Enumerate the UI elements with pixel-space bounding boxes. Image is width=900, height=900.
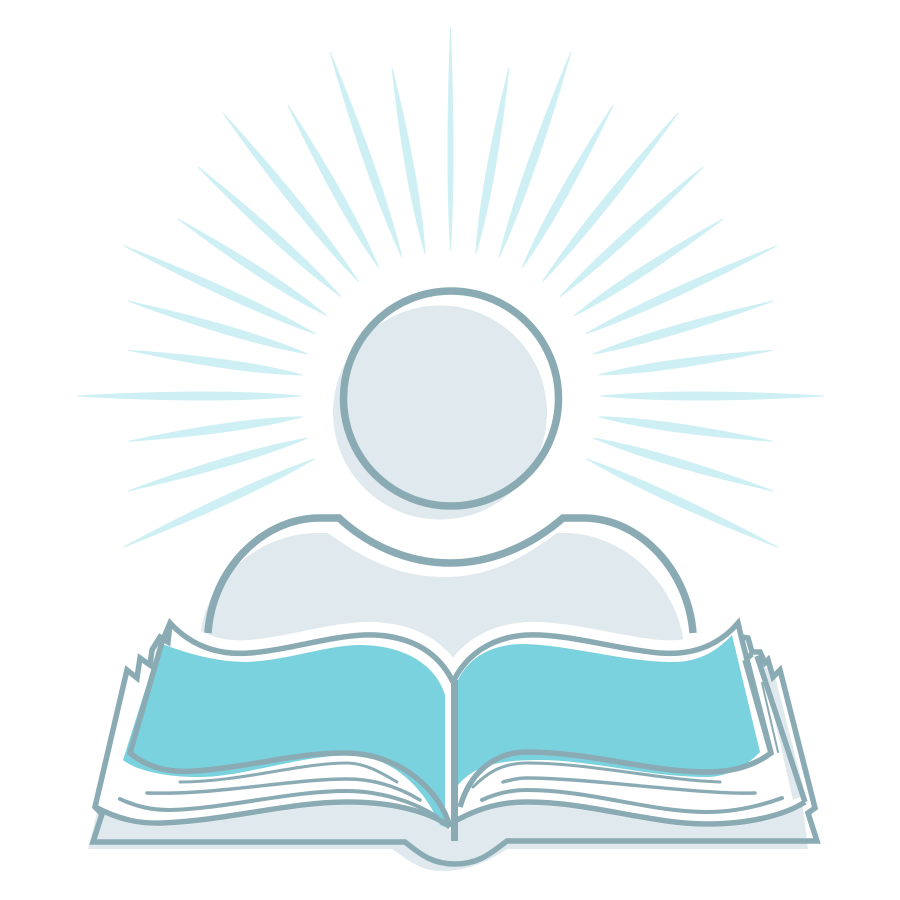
cover and stepped page stack outline <box>93 623 817 864</box>
book cover shadow fill <box>88 800 808 871</box>
person body <box>200 518 693 665</box>
right page outline <box>453 623 771 807</box>
open book <box>88 623 817 871</box>
right page edge shadow <box>763 668 805 800</box>
left teal page <box>123 643 445 827</box>
white page block <box>95 623 805 827</box>
bottom left thick page line <box>95 802 450 827</box>
right teal page <box>458 635 760 785</box>
sunburst rays <box>78 28 824 551</box>
white halo around pages <box>170 623 738 682</box>
left page outline <box>130 623 453 827</box>
book spine <box>451 680 458 841</box>
thin page lines <box>120 683 782 817</box>
page outlines <box>93 623 817 864</box>
person head <box>333 291 558 520</box>
right inner page stack <box>745 654 805 802</box>
bottom right thick page line <box>457 802 805 824</box>
